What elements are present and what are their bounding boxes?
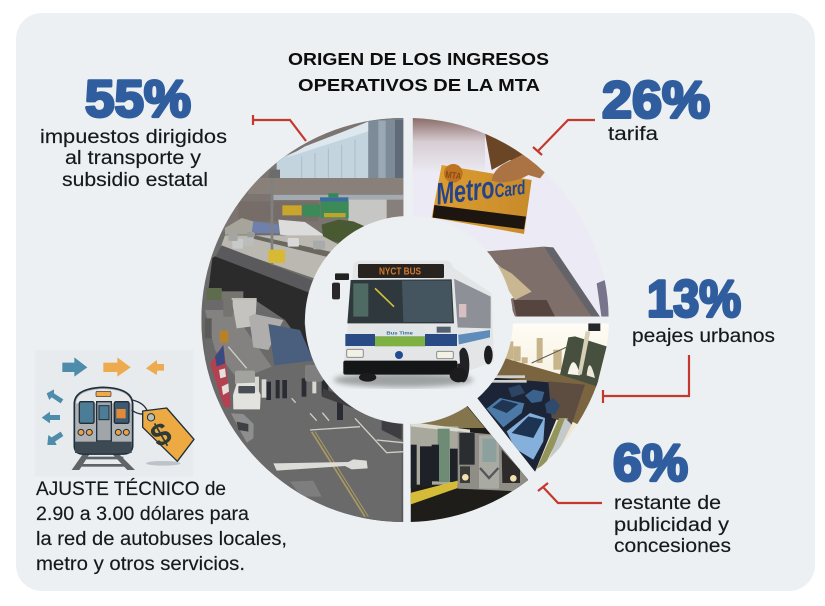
- icon: train with price tag: [35, 350, 194, 477]
- stat: 55% impuestos: 55%: [85, 70, 191, 128]
- text block: fare adjustment: 2.90 a 3.00 dólares para: [36, 504, 249, 525]
- photo: highway and street, 55%: [200, 110, 407, 527]
- stat: 6% publicidad y concesiones: concesiones: [614, 536, 731, 557]
- train: [72, 387, 147, 470]
- icon: bus, centre circle: NYCT BUS: [379, 267, 421, 278]
- arrow: 55% leader: [253, 115, 306, 141]
- text block: fare adjustment: metro y otros servicios.: [36, 554, 245, 575]
- stat: 55% impuestos: [40, 70, 227, 191]
- stat: 55% impuestos: subsidio estatal: [62, 170, 208, 191]
- MetroCard: MTA: [445, 169, 462, 182]
- price tag: [143, 408, 194, 466]
- stat: 26% tarifa: 26%: [602, 72, 710, 130]
- stat: 13% peajes urbanos: peajes urbanos: [632, 326, 775, 347]
- bus front: [343, 261, 460, 364]
- MetroCard: MetroCard: [434, 167, 528, 212]
- text block: fare adjustment: la red de autobuses locales,: [36, 529, 287, 550]
- photo: bridge and traffic, 13%: [477, 323, 609, 472]
- stat: 6% publicidad y concesiones: 6%: [613, 434, 688, 492]
- price tag: $: [144, 414, 178, 454]
- icon: blue and orange arrows: [42, 357, 164, 445]
- stat: 55% impuestos: impuestos dirigidos: [40, 127, 227, 148]
- donut photo chart: [200, 110, 613, 527]
- photo: MetroCard, 26%: [410, 115, 613, 318]
- icon: bus, centre circle: [305, 216, 513, 424]
- photo: subway train, 6%: [410, 406, 528, 522]
- title: OPERATIVOS DE LA MTA: [298, 75, 540, 95]
- MetroCard: [432, 164, 532, 234]
- arrow: 6% leader: [538, 483, 602, 503]
- title: ORIGEN DE LOS INGRESOS: [288, 49, 549, 69]
- arrow: 26% leader: [533, 120, 595, 155]
- stat: 26% tarifa: tarifa: [608, 124, 659, 145]
- icon: bus, centre circle: Bus Time: [386, 330, 413, 336]
- stat: 6% publicidad y concesiones: restante de: [614, 493, 721, 514]
- arrow: 13% leader: [603, 355, 689, 403]
- bus side: [452, 267, 494, 372]
- stat: 6% publicidad y concesiones: publicidad y: [614, 515, 730, 536]
- text block: fare adjustment: [36, 479, 287, 575]
- stat: 13% peajes urbanos: [632, 270, 775, 347]
- stat: 6% publicidad y concesiones: [613, 434, 731, 557]
- stat: 55% impuestos: al transporte y: [65, 148, 202, 169]
- stat: 13% peajes urbanos: 13%: [647, 270, 741, 328]
- title: [288, 49, 549, 95]
- text block: fare adjustment: AJUSTE TÉCNICO de: [36, 479, 226, 500]
